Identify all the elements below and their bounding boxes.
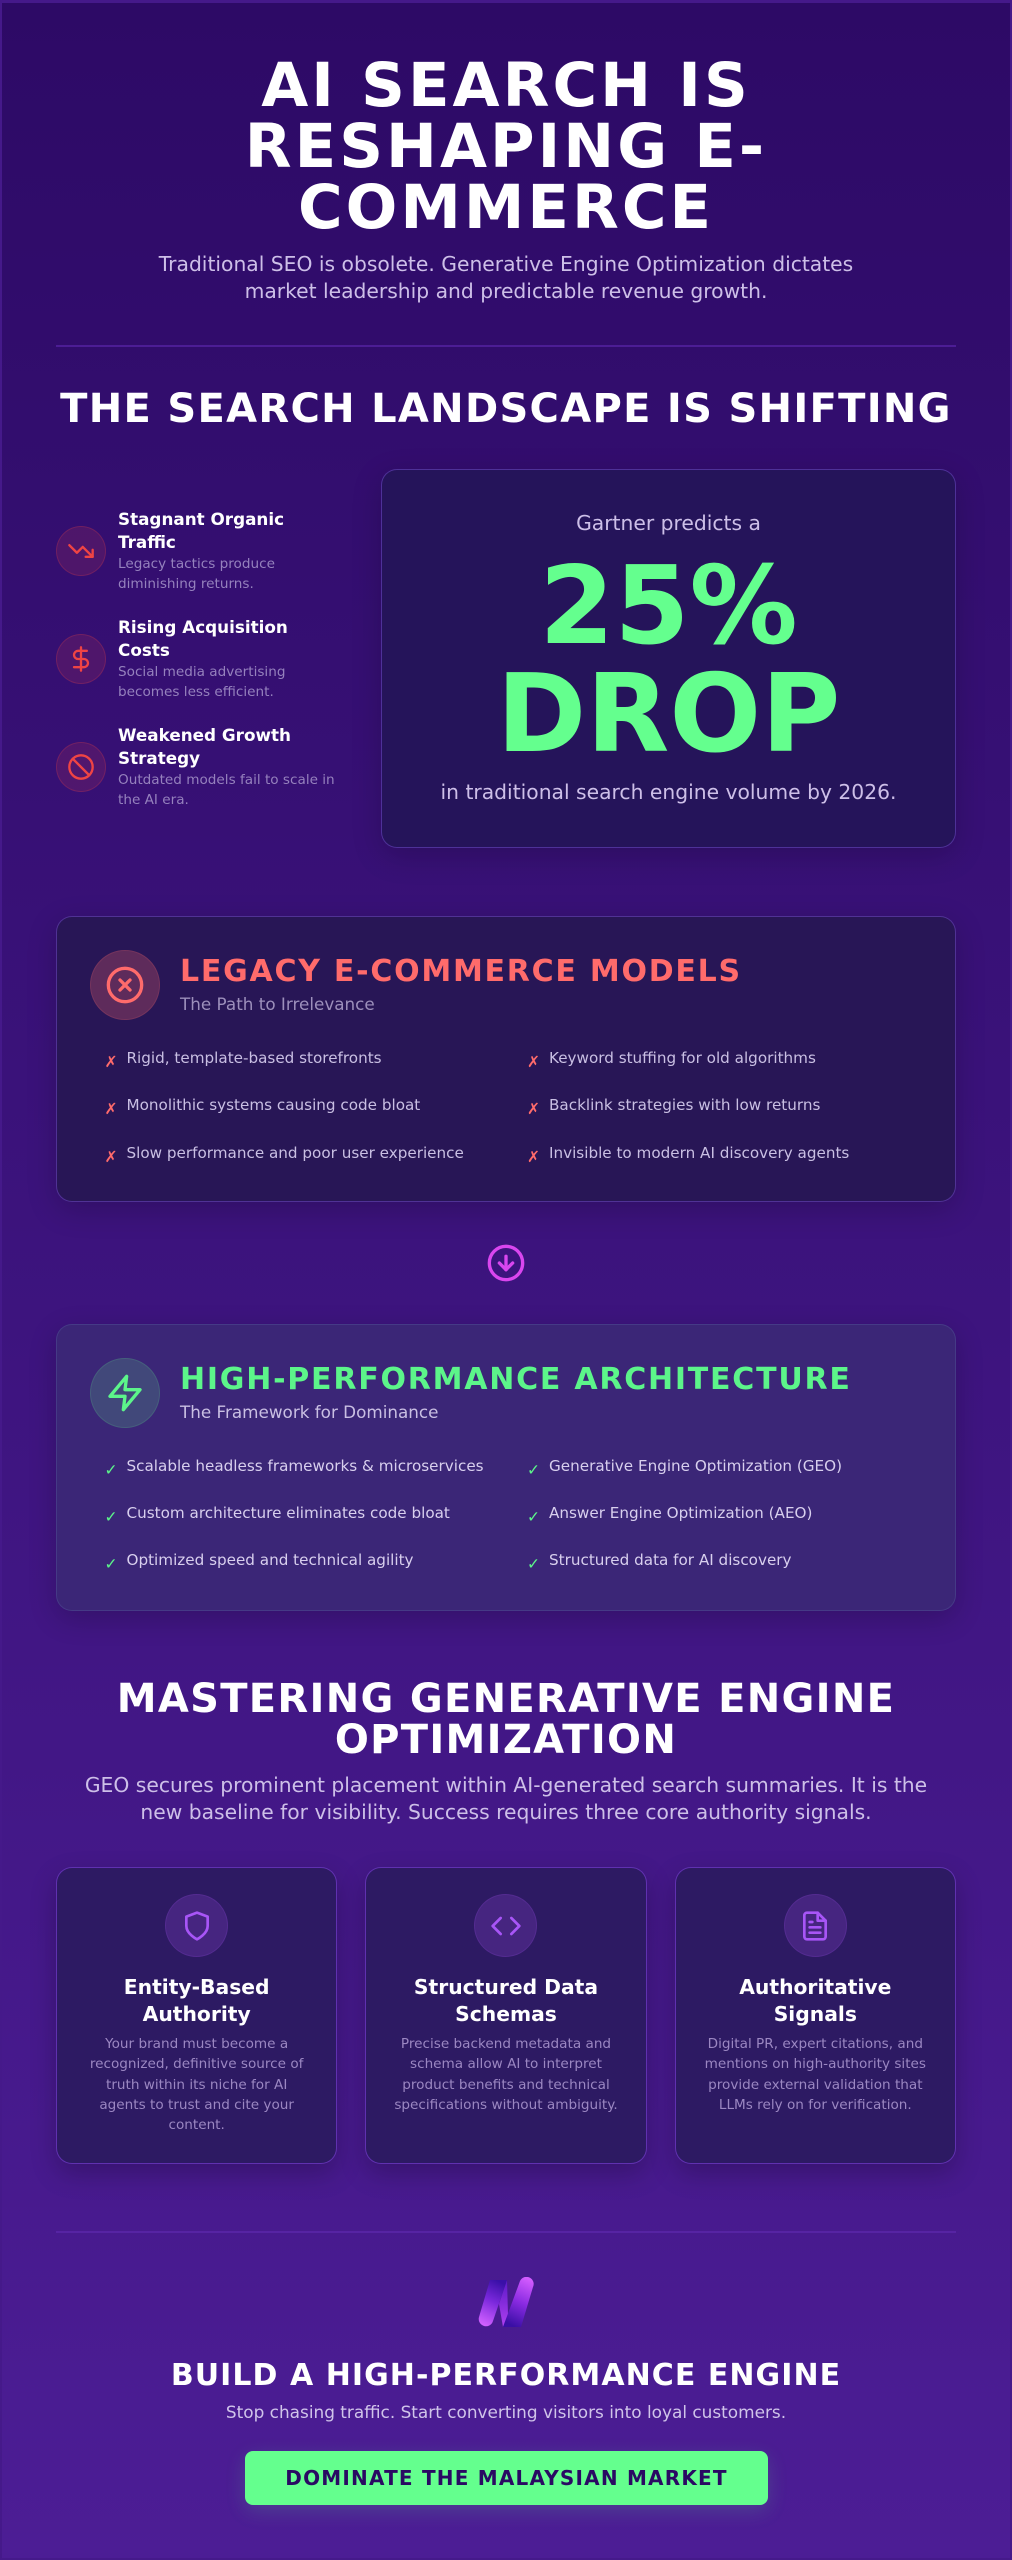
right list — [527, 1049, 849, 1166]
call to action heading: BUILD A HIGH-PERFORMANCE ENGINE — [171, 2358, 841, 2393]
left list: Slow performance and poor user experience — [126, 1144, 464, 1162]
panel: high-performance architecture — [56, 1324, 956, 1611]
section heading: mastering geo: MASTERING GENERATIVE ENGINE — [117, 1676, 895, 1722]
panel: legacy e-commerce models: ✗ — [527, 1148, 540, 1166]
item text: Traffic — [118, 532, 176, 552]
card text — [705, 2036, 926, 2113]
card text: provide external validation that — [708, 2077, 923, 2093]
panel subheading: The Framework for Dominance — [180, 1402, 438, 1422]
card text — [394, 2036, 618, 2113]
section intro: GEO secures prominent placement within AI-generated search summaries. It is the — [85, 1773, 927, 1797]
card text: recognized, definitive source of — [90, 2056, 303, 2072]
subtitle: Traditional SEO is obsolete. Generative Engine Optimization dictates — [159, 252, 853, 276]
card title: Signals — [774, 2002, 857, 2026]
stat lead-in: Gartner predicts a — [576, 511, 761, 535]
item text: Outdated models fail to scale in — [118, 772, 335, 788]
subtitle: market leadership and predictable revenue growth. — [245, 279, 767, 303]
card text: specifications without ambiguity. — [394, 2097, 618, 2113]
right list: Answer Engine Optimization (AEO) — [549, 1504, 812, 1522]
right list: Backlink strategies with low returns — [549, 1096, 820, 1114]
section heading: mastering geo — [117, 1676, 895, 1763]
item text: Stagnant Organic — [118, 508, 284, 528]
panel: legacy e-commerce models: ✗ — [527, 1053, 540, 1071]
card text: product benefits and technical — [402, 2077, 610, 2093]
left list: Optimized speed and technical agility — [126, 1551, 414, 1569]
panel: high-performance architecture: ✓ — [104, 1555, 118, 1573]
card: authoritative signals — [675, 1867, 956, 2164]
card: entity-based authority — [56, 1867, 337, 2164]
card text: agents to trust and cite your — [99, 2097, 294, 2113]
item text: the AI era. — [118, 792, 189, 808]
panel: gartner statistic — [381, 469, 956, 848]
section intro: new baseline for visibility. Success requires three core authority signals. — [140, 1800, 872, 1824]
item text: becomes less efficient. — [118, 684, 274, 700]
icon: dollar sign — [56, 634, 106, 684]
item text: Rising Acquisition — [118, 616, 288, 636]
panel: legacy e-commerce models: ✗ — [104, 1100, 118, 1118]
card title — [739, 1975, 891, 2026]
icon: document — [784, 1894, 847, 1957]
card text: mentions on high-authority sites — [705, 2056, 926, 2072]
left list — [104, 1049, 464, 1166]
icon: brand logo — [478, 2277, 534, 2327]
subtitle — [158, 252, 853, 303]
card text: Precise backend metadata and — [401, 2036, 611, 2052]
big number: DROP — [497, 652, 840, 777]
panel: high-performance architecture: ✓ — [527, 1555, 540, 1573]
panel: legacy e-commerce models: ✗ — [104, 1148, 118, 1166]
section heading: mastering geo: OPTIMIZATION — [335, 1717, 677, 1763]
item text: Strategy — [118, 748, 200, 768]
list item: stagnant organic traffic — [56, 508, 284, 592]
left list: Monolithic systems causing code bloat — [126, 1096, 420, 1114]
panel: high-performance architecture: ✓ — [104, 1460, 118, 1478]
left list: Scalable headless frameworks & microservices — [126, 1456, 484, 1474]
card text: LLMs rely on for verification. — [719, 2097, 912, 2113]
card text: Your brand must become a — [105, 2036, 288, 2052]
panel: legacy e-commerce models — [56, 916, 956, 1202]
panel subheading: The Path to Irrelevance — [180, 994, 375, 1014]
list item: rising acquisition costs — [56, 616, 288, 700]
right list: Invisible to modern AI discovery agents — [549, 1144, 849, 1162]
call to action text: Stop chasing traffic. Start converting visitors into loyal customers. — [226, 2402, 786, 2422]
card text: schema allow AI to interpret — [410, 2056, 602, 2072]
card title: Entity-Based — [124, 1975, 270, 1999]
card text — [90, 2036, 304, 2133]
big number — [497, 544, 840, 777]
card title: Authoritative — [739, 1975, 891, 1999]
card text: Digital PR, expert citations, and — [708, 2036, 923, 2052]
card text: truth within its niche for AI — [106, 2077, 287, 2093]
item text: Social media advertising — [118, 664, 285, 680]
panel: legacy e-commerce models: ✗ — [527, 1100, 540, 1118]
item text: Legacy tactics produce — [118, 556, 275, 572]
item text — [118, 616, 288, 700]
right list: Generative Engine Optimization (GEO) — [549, 1456, 842, 1474]
list item: weakened growth strategy — [56, 724, 335, 808]
panel: high-performance architecture: ✓ — [527, 1460, 540, 1478]
title — [245, 51, 767, 243]
button: dominate the malaysian market: DOMINATE THE MALAYSIAN MARKET — [285, 2466, 728, 2490]
panel heading: HIGH-PERFORMANCE ARCHITECTURE — [180, 1362, 852, 1397]
panel: high-performance architecture: ✓ — [527, 1508, 540, 1526]
icon: ban — [56, 742, 106, 792]
title: AI SEARCH IS — [261, 51, 751, 121]
item text: diminishing returns. — [118, 576, 254, 592]
card title: Schemas — [455, 2002, 557, 2026]
card title: Structured Data — [414, 1975, 598, 1999]
section intro — [85, 1773, 927, 1824]
section heading: search landscape: THE SEARCH LANDSCAPE IS SHIFTING — [60, 386, 952, 432]
arrow: down to high-performance — [488, 1244, 524, 1282]
item text: Costs — [118, 640, 170, 660]
left list — [104, 1456, 484, 1573]
icon: code — [474, 1894, 537, 1957]
card title: Authority — [143, 2002, 251, 2026]
item text — [118, 724, 335, 808]
icon: shield — [165, 1894, 228, 1957]
card title — [414, 1975, 598, 2026]
right list: Structured data for AI discovery — [549, 1551, 792, 1569]
icon: x circle — [90, 950, 160, 1020]
left list: Rigid, template-based storefronts — [126, 1049, 382, 1067]
right list — [527, 1456, 842, 1573]
title: RESHAPING E- — [245, 112, 767, 182]
card title — [124, 1975, 270, 2026]
item text: Weakened Growth — [118, 724, 291, 744]
card: structured data schemas — [365, 1867, 647, 2164]
big number: 25% — [539, 544, 798, 669]
card text: content. — [168, 2117, 225, 2133]
left list: Custom architecture eliminates code bloat — [126, 1504, 450, 1522]
panel heading: LEGACY E-COMMERCE MODELS — [180, 954, 742, 989]
panel: legacy e-commerce models: ✗ — [104, 1053, 118, 1071]
stat caption: in traditional search engine volume by 2026. — [441, 780, 896, 804]
title: COMMERCE — [298, 173, 714, 243]
item text — [118, 508, 284, 592]
panel: high-performance architecture: ✓ — [104, 1508, 118, 1526]
icon: trending down — [56, 526, 106, 576]
right list: Keyword stuffing for old algorithms — [549, 1049, 816, 1067]
icon: lightning bolt — [90, 1358, 160, 1428]
button: dominate the malaysian market — [245, 2451, 768, 2505]
